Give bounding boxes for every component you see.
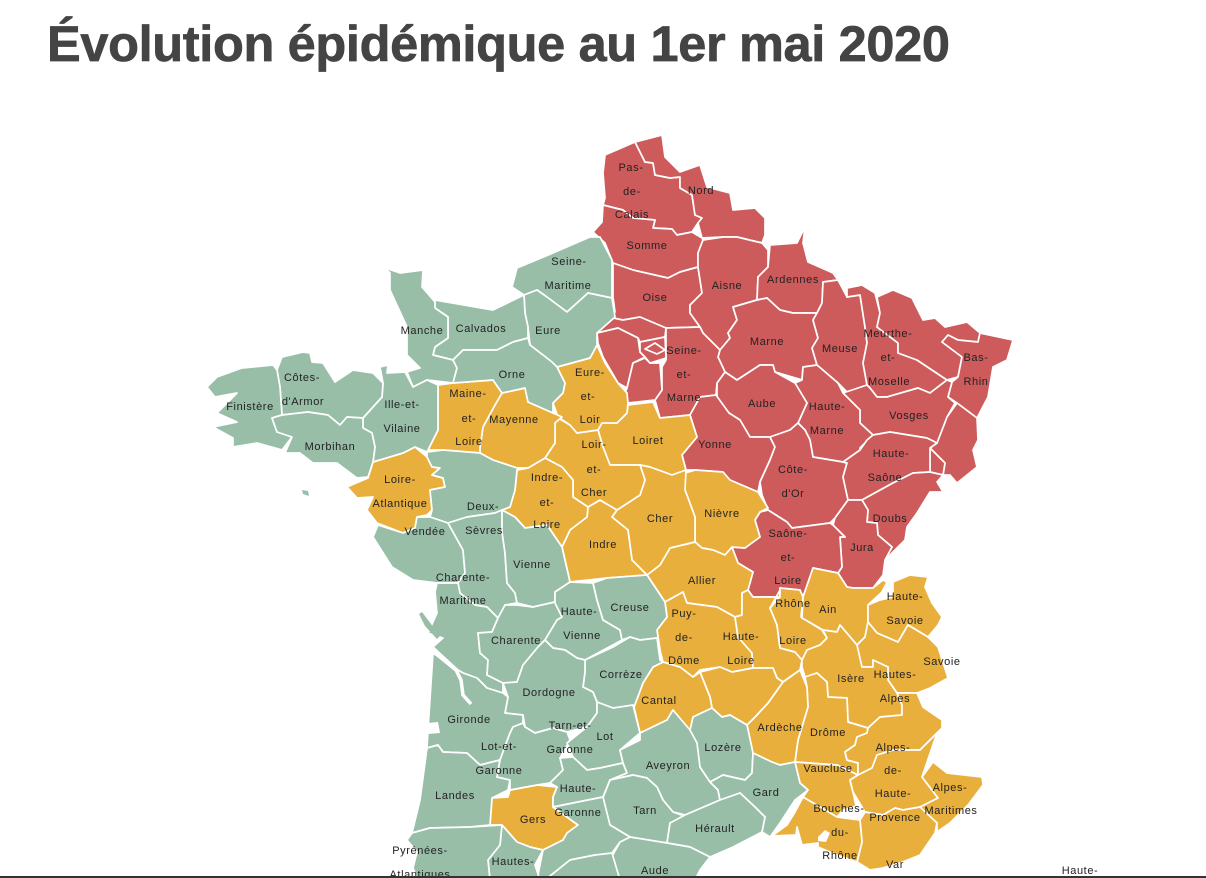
department labels: Garonne: [475, 765, 523, 777]
Vosges: [843, 380, 955, 443]
department labels: Lozère: [704, 742, 742, 754]
department labels: Alpes-: [876, 742, 910, 754]
department labels: Indre: [589, 539, 617, 551]
Maine-et-Loire zone: [427, 450, 528, 523]
Mayenne: [428, 380, 502, 453]
Hautes-Alpes: [845, 693, 942, 775]
title: Évolution épidémique au 1er mai 2020: [47, 15, 950, 72]
department labels: Meurthe-: [864, 328, 912, 340]
Ariège: [545, 853, 620, 878]
department labels: Garonne: [546, 744, 594, 756]
department labels: Orne: [499, 369, 525, 381]
department labels: Alpes: [880, 693, 910, 705]
department labels: Haute-: [873, 448, 909, 460]
department labels: Hautes-: [874, 669, 916, 681]
map of France: departments by epidemic status: [207, 135, 1098, 878]
department labels: Loire: [779, 635, 807, 647]
Saône-et-Loire: [732, 510, 845, 597]
department labels: Manche: [401, 325, 443, 337]
department labels: Garonne: [554, 807, 602, 819]
Puy-de-Dôme: [657, 592, 753, 677]
Charente-Maritime: [428, 583, 503, 693]
department labels: et-: [881, 352, 895, 364]
department labels: Lot: [596, 731, 614, 743]
Oise: [608, 263, 702, 328]
Nord: [635, 135, 765, 243]
department labels: Creuse: [610, 602, 650, 614]
Corrèze: [583, 637, 663, 708]
department labels: Tarn-et-: [549, 720, 591, 732]
Tarn-et-Garonne: [550, 757, 627, 807]
department labels: Aveyron: [646, 760, 690, 772]
Pyrénées-Atlantiques: [407, 825, 502, 878]
Haute-Loire zone: [735, 590, 802, 682]
department labels: et-: [540, 497, 554, 509]
Doubs: [862, 472, 943, 560]
department labels: Aude: [641, 865, 669, 877]
Lot-et-Garonne: [497, 723, 570, 790]
department labels: Haute-: [561, 606, 597, 618]
department labels: Meuse: [822, 343, 858, 355]
department labels: de-: [675, 632, 693, 644]
department labels: Ille-et-: [384, 399, 420, 411]
Landes: [412, 745, 510, 833]
department labels: et-: [677, 369, 691, 381]
department labels: Haute-: [887, 591, 923, 603]
Hérault: [667, 793, 765, 857]
department labels: Gard: [753, 787, 779, 799]
Haute-Garonne: [537, 797, 630, 878]
department labels: de-: [884, 765, 902, 777]
department labels: Indre-: [531, 472, 563, 484]
department labels: Nièvre: [704, 508, 740, 520]
department labels: Maritimes: [924, 805, 978, 817]
department labels: Pas-: [618, 162, 644, 174]
department labels: Cantal: [641, 695, 677, 707]
Yvelines: [597, 328, 645, 388]
department labels: Marne: [810, 425, 844, 437]
Drôme: [795, 673, 868, 775]
department labels: Vaucluse: [803, 763, 853, 775]
department labels: Dôme: [668, 655, 700, 667]
Yonne: [682, 395, 775, 492]
department labels: Puy-: [671, 608, 697, 620]
department labels: Rhône: [775, 598, 811, 610]
Creuse: [593, 575, 667, 650]
Cantal: [634, 662, 712, 733]
Haute-Marne: [795, 365, 873, 462]
department labels: Loire-: [384, 474, 416, 486]
department labels: Saône: [868, 472, 902, 484]
department labels: Savoie: [886, 615, 924, 627]
department labels: Finistère: [226, 401, 274, 413]
Orne: [453, 338, 565, 413]
department labels: Marne: [667, 392, 701, 404]
orange departments: [347, 345, 983, 870]
department labels: et-: [587, 464, 601, 476]
department labels: Vienne: [563, 630, 601, 642]
department labels: Somme: [627, 240, 667, 252]
department labels: Vosges: [889, 410, 929, 422]
department labels: Drôme: [810, 727, 846, 739]
Ille-et-Vilaine: [363, 365, 438, 462]
department labels: et-: [781, 552, 795, 564]
department labels: Eure-: [575, 367, 605, 379]
department labels: d'Or: [782, 488, 804, 500]
Cher: [612, 465, 695, 575]
Savoie: [855, 622, 948, 693]
department labels: Cher: [581, 487, 607, 499]
Meuse: [812, 280, 867, 392]
department labels: Haute-: [1062, 865, 1098, 877]
Eure: [524, 290, 615, 367]
department labels: Charente-: [436, 572, 490, 584]
department labels: Vendée: [405, 526, 445, 538]
Finistère: [207, 365, 292, 450]
Vaucluse: [795, 762, 858, 817]
department labels: Haute-: [809, 401, 845, 413]
Tarn: [602, 775, 687, 843]
Dordogne: [503, 640, 597, 733]
department labels: de-: [623, 186, 641, 198]
department labels: Rhin: [963, 376, 989, 388]
department labels: Loiret: [632, 435, 664, 447]
Gers: [490, 785, 578, 850]
department labels: Côtes-: [284, 372, 320, 384]
department labels: Deux-: [467, 501, 499, 513]
department labels: Ain: [819, 604, 837, 616]
Var: [857, 807, 937, 870]
Hauts-de-Seine: [640, 337, 666, 363]
department labels: Haute-: [723, 631, 759, 643]
Territoire de Belfort: [930, 448, 945, 475]
department labels: Yonne: [698, 439, 732, 451]
department labels: Aube: [748, 398, 776, 410]
department labels: Hautes-: [492, 856, 534, 868]
Morbihan: [272, 412, 375, 478]
department labels: Allier: [688, 575, 716, 587]
department labels: Landes: [435, 790, 475, 802]
department labels: Ardèche: [757, 722, 803, 734]
Côte-d'Or: [760, 423, 848, 528]
department labels: Haute-: [875, 788, 911, 800]
Lot: [567, 702, 640, 770]
Haute-Saône: [843, 432, 937, 500]
Calvados: [433, 295, 528, 360]
Haute-Savoie: [868, 575, 942, 642]
department labels: Loir: [580, 414, 600, 426]
Eure-et-Loir: [553, 345, 628, 433]
department labels: Côte-: [778, 464, 808, 476]
department labels: Mayenne: [489, 414, 539, 426]
department labels: Savoie: [923, 656, 961, 668]
Indre-et-Loire: [502, 458, 588, 547]
department labels: Moselle: [868, 376, 910, 388]
department labels: Pyrénées-: [392, 845, 448, 857]
department labels: Dordogne: [522, 687, 576, 699]
Ain: [802, 568, 887, 645]
Indre: [562, 500, 647, 582]
department labels: Isère: [837, 673, 865, 685]
Paris: [645, 343, 665, 354]
department labels: Ardennes: [767, 274, 819, 286]
department labels: [226, 162, 1098, 878]
department labels: Vienne: [513, 559, 551, 571]
Isère: [802, 625, 902, 728]
Ardennes: [757, 227, 838, 313]
Haute-Loire: [700, 667, 783, 725]
Moselle: [877, 290, 980, 380]
department labels: Doubs: [873, 513, 907, 525]
department labels: Bouches-: [813, 803, 865, 815]
department labels: Seine-: [551, 256, 587, 268]
Aube: [717, 365, 807, 437]
department labels: Maritime: [440, 595, 486, 607]
department labels: Nord: [688, 185, 714, 197]
department labels: Loire: [727, 655, 755, 667]
department labels: Maine-: [449, 388, 487, 400]
department labels: Loire: [774, 575, 802, 587]
Alpes-Maritimes: [920, 762, 983, 832]
Loiret: [598, 402, 697, 475]
department labels: Haute-: [560, 783, 596, 795]
Haute-Vienne: [545, 582, 622, 660]
Haut-Rhin: [930, 403, 978, 483]
Sarthe: [480, 388, 562, 468]
red departments: [593, 135, 1013, 597]
department labels: Vilaine: [383, 423, 421, 435]
department labels: et-: [581, 391, 595, 403]
Somme: [593, 205, 703, 278]
department labels: Var: [886, 859, 904, 871]
department labels: Alpes-: [933, 782, 967, 794]
department labels: Maritime: [545, 280, 591, 292]
Loire-Atlantique: [347, 447, 445, 533]
Manche: [385, 268, 457, 387]
Ardèche: [747, 670, 808, 765]
Loir-et-Cher: [545, 418, 645, 510]
department labels: Rhône: [822, 850, 858, 862]
department labels: Gers: [520, 814, 546, 826]
Rhône / Loire: [770, 588, 827, 660]
Seine-Maritime: [512, 237, 612, 312]
department labels: Gironde: [447, 714, 491, 726]
Gard: [710, 753, 808, 837]
department labels: Oise: [642, 292, 668, 304]
Nièvre: [685, 470, 768, 555]
department labels: Tarn: [633, 805, 657, 817]
Charente: [478, 602, 562, 683]
department labels: Lot-et-: [481, 741, 517, 753]
department labels: Cher: [647, 513, 673, 525]
department labels: Aisne: [712, 280, 742, 292]
Hautes-Pyrénées: [488, 825, 543, 878]
department labels: Bas-: [963, 352, 989, 364]
department labels: Corrèze: [599, 669, 643, 681]
department labels: Provence: [869, 812, 921, 824]
bottom edge line: [0, 876, 1206, 878]
Meurthe-et-Moselle: [847, 285, 947, 397]
department labels: Eure: [535, 325, 561, 337]
department labels: Calvados: [456, 323, 506, 335]
department labels: Calais: [615, 209, 649, 221]
department labels: Charente: [491, 635, 541, 647]
Côtes-d'Armor: [277, 352, 383, 425]
Aveyron: [610, 710, 720, 815]
Bas-Rhin: [942, 333, 1013, 418]
coast details: estuary, bays and islands: [302, 490, 830, 842]
department labels: Hérault: [695, 823, 735, 835]
department labels: Seine-: [666, 345, 702, 357]
Aude: [610, 837, 710, 878]
green departments: [207, 237, 808, 878]
Deux-Sèvres: [448, 510, 517, 618]
Essonne: [625, 358, 662, 403]
Marne: [718, 298, 818, 380]
department labels: et-: [462, 413, 476, 425]
department labels: Marne: [750, 336, 784, 348]
department labels: Loire: [533, 519, 561, 531]
Aisne: [690, 237, 768, 350]
Jura: [833, 500, 892, 588]
Gironde: [427, 653, 523, 765]
Seine-et-Marne: [655, 327, 725, 418]
department labels: Jura: [850, 542, 874, 554]
Alpes-de-Haute-Provence: [850, 733, 938, 815]
department labels: Atlantique: [373, 498, 427, 510]
department labels: du-: [831, 827, 849, 839]
Val-d'Oise: [597, 317, 666, 342]
Bouches-du-Rhône: [772, 797, 862, 862]
Lozère: [690, 708, 753, 782]
department labels: Loire: [455, 436, 483, 448]
department labels: Sèvres: [465, 525, 503, 537]
department labels: d'Armor: [282, 396, 324, 408]
department labels: Morbihan: [305, 441, 355, 453]
department labels: Saône-: [768, 528, 808, 540]
department labels: Loir-: [581, 439, 607, 451]
Pas-de-Calais: [603, 142, 702, 235]
Vienne: [502, 510, 570, 607]
Allier: [647, 542, 753, 617]
Vendée: [373, 517, 465, 583]
